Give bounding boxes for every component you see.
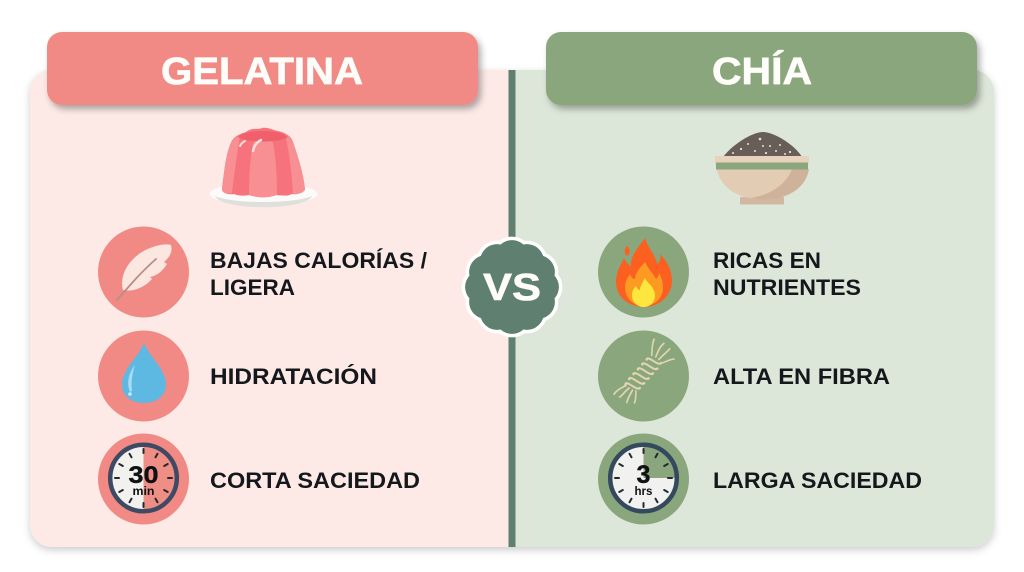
center divider: [508, 70, 516, 547]
icon: feather: [117, 244, 172, 300]
label: long satiety: LARGA SACIEDAD: [713, 468, 922, 493]
label: short satiety: CORTA SACIEDAD: [210, 468, 420, 493]
item: low calories: [98, 226, 189, 318]
VS badge: VS: [483, 267, 541, 309]
label: nutrients: [713, 248, 861, 300]
label: nutrients: NUTRIENTES: [713, 275, 861, 300]
panel backgrounds: [30, 70, 994, 547]
icon: water drop: [122, 343, 166, 403]
header: Gelatina: GELATINA: [161, 51, 363, 93]
label: nutrients: RICAS EN: [713, 248, 821, 273]
icon: 30 min timer: min: [132, 484, 154, 498]
icon: 3 hrs timer: 3: [637, 461, 650, 489]
icon: 3 hrs timer: hrs: [634, 484, 653, 498]
icon: 3 hrs timer: [610, 445, 677, 511]
icon: 30 min timer: [110, 445, 177, 511]
label: low calories: LIGERA: [210, 275, 295, 300]
item: nutrients: [598, 226, 689, 318]
label: low calories: BAJAS CALORÍAS /: [210, 248, 428, 273]
icon: gelatin on plate: [210, 128, 318, 207]
item: long satiety: [598, 434, 689, 524]
header: Chía: CHÍA: [712, 49, 812, 93]
item: hydration: [98, 330, 189, 422]
icon: rope: [609, 337, 677, 408]
label: low calories: [210, 248, 428, 300]
icon: chia bowl: [715, 132, 809, 204]
header: Chía: [546, 32, 977, 105]
item: short satiety: [98, 434, 189, 524]
item: fiber: [598, 330, 689, 422]
icon: flame: [616, 238, 672, 307]
icon: 30 min timer: 30: [128, 462, 158, 489]
VS badge: [465, 240, 559, 334]
label: fiber: ALTA EN FIBRA: [713, 364, 890, 389]
label: hydration: HIDRATACIÓN: [210, 364, 377, 389]
header: Gelatina: [47, 32, 478, 105]
